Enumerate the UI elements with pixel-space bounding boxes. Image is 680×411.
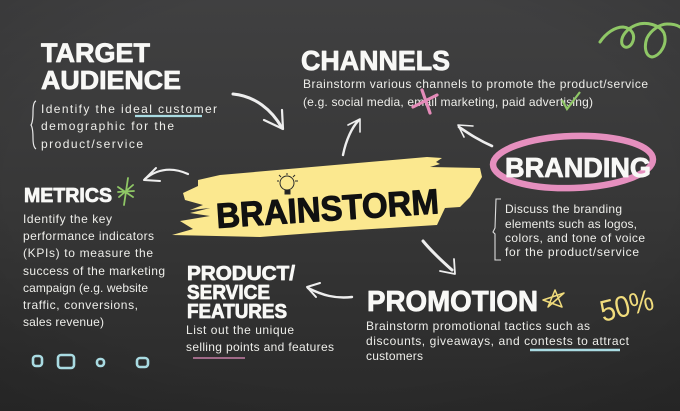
panel: target audience — [31, 38, 217, 151]
text: product features description: List out the unique — [186, 323, 294, 337]
panel: product service features — [186, 263, 334, 358]
arrow: to product features — [307, 283, 352, 298]
heading: product service features: FEATURES — [187, 301, 287, 323]
heading: product service features: SERVICE — [187, 282, 270, 304]
arrow: to channels from audience — [233, 94, 283, 129]
text: target audience description: demographic for the — [41, 119, 174, 133]
title: brainstorm: BRAINSTORM — [215, 182, 440, 236]
icon: yellow star — [543, 290, 564, 307]
underline: selling points — [193, 357, 245, 359]
arrow: to promotion — [423, 241, 455, 274]
arrow: from branding to channels — [458, 125, 492, 146]
arrow: to metrics — [144, 168, 188, 181]
text: metrics description: campaign (e.g. website — [23, 281, 148, 295]
text: promotion description: customers — [366, 349, 423, 363]
underline: ideal customer — [135, 115, 202, 117]
text: metrics description: sales revenue) — [23, 315, 104, 329]
decoration: green squiggle — [600, 23, 680, 57]
heading: target audience — [41, 38, 181, 95]
text: branding description: elements such as logos, — [505, 217, 637, 231]
underline: contests to attract — [530, 349, 620, 351]
panel: promotion — [366, 284, 657, 363]
text: metrics description: Identify the key — [23, 212, 112, 226]
text: branding description: colors, and tone of voice — [505, 231, 645, 245]
arrow: to channels from center — [343, 119, 360, 155]
panel: branding — [492, 133, 654, 260]
text: promotion description: Brainstorm promotional tactics such as — [366, 319, 590, 333]
text: product features description — [186, 323, 334, 354]
heading: metrics: METRICS — [24, 185, 112, 207]
heading: branding: BRANDING — [505, 152, 651, 183]
central brush stroke with title — [172, 157, 482, 237]
heading: product service features — [187, 263, 295, 323]
text: target audience description: Identify the ideal customer — [41, 102, 217, 116]
text: product features description: selling points and features — [186, 340, 334, 354]
text: channels description: (e.g. social media, email marketing, paid advertising) — [303, 95, 593, 109]
arrows between topics — [144, 94, 492, 298]
text: target audience description — [41, 102, 217, 151]
text: metrics description: (KPIs) to measure the — [23, 246, 153, 260]
panel: channels — [301, 45, 648, 113]
text: metrics description — [23, 212, 165, 329]
heading: target audience: AUDIENCE — [41, 65, 181, 95]
text: metrics description: performance indicators — [23, 229, 154, 243]
heading: channels: CHANNELS — [301, 45, 450, 76]
icon: pink cross — [413, 90, 437, 113]
text: channels description: Brainstorm various channels to promote the product/service — [303, 77, 648, 91]
icon: green star burst — [118, 178, 134, 205]
text: branding description: for the product/service — [505, 245, 639, 259]
text: target audience description: product/service — [41, 137, 143, 151]
heading: target audience: TARGET — [41, 38, 150, 68]
heading: promotion: PROMOTION — [367, 286, 538, 318]
text: branding description: Discuss the branding — [505, 202, 622, 216]
icon: light bulb — [277, 173, 298, 194]
brace — [31, 101, 36, 149]
text: metrics description: success of the marketing — [23, 264, 165, 278]
icons: blue chalk squares — [33, 355, 148, 368]
text: promotion description — [366, 319, 630, 363]
text: channels description — [303, 77, 648, 109]
pink ellipse — [492, 133, 654, 191]
text: promotion description: discounts, giveaways, and contests to attract — [366, 334, 630, 348]
text: branding description — [505, 202, 645, 259]
text: metrics description: traffic, conversions, — [23, 298, 138, 312]
brace — [493, 199, 501, 260]
heading: product service features: PRODUCT/ — [187, 263, 295, 285]
yellow brush stroke — [172, 157, 482, 237]
icon: green check — [562, 92, 580, 109]
text: 50 percent: 50% — [597, 284, 657, 329]
panel: metrics — [23, 178, 165, 368]
